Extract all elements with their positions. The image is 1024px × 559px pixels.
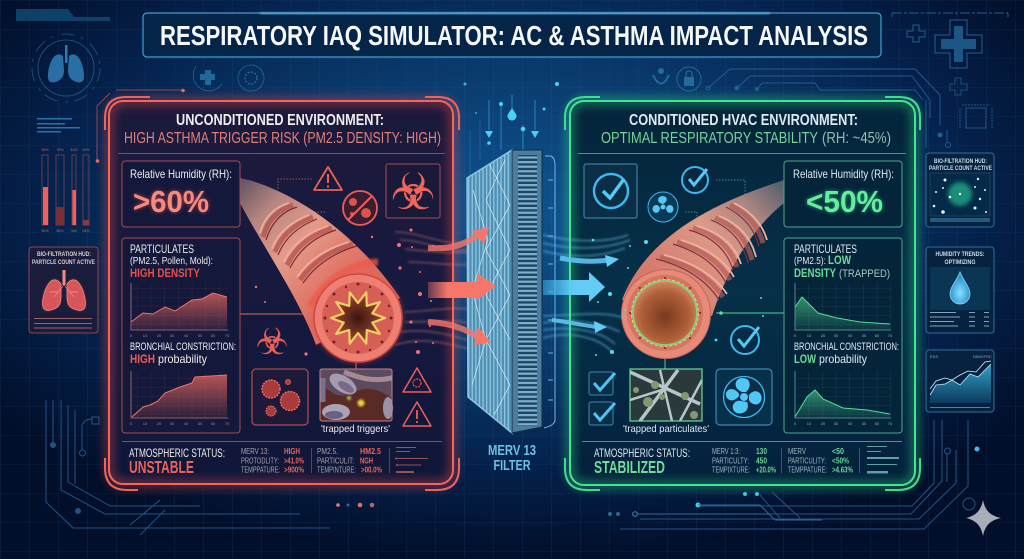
box: particulates and constriction xyxy=(784,238,902,433)
chart: particulate density: 0 xyxy=(794,333,797,338)
mini gauges: red xyxy=(395,447,428,473)
title: RESPIRATORY IAQ SIMULATOR: AC & ASTHMA IMPACT ANALYSIS xyxy=(160,20,868,51)
chart: particulate density: 40 xyxy=(848,333,853,338)
icon: lock dial xyxy=(677,67,701,91)
chart: particulate density: 70 xyxy=(225,333,230,338)
bar chart: left side gauges: 8.20 xyxy=(71,148,77,152)
heading: left HUD xyxy=(32,252,95,266)
readout table: red: PM2.5. xyxy=(317,447,338,456)
header accent: top left bar xyxy=(16,9,110,21)
heading xyxy=(124,112,441,147)
readout table: green: MERV xyxy=(788,447,807,456)
chart: constriction probability: 10 xyxy=(807,421,812,426)
icon: warning triangle lower xyxy=(403,402,431,426)
icon: lung scanner xyxy=(32,34,100,102)
readout table: red: PROTODLITY: xyxy=(241,456,279,466)
icon: check circle lower xyxy=(731,326,759,354)
chart: particulate density: 40 xyxy=(184,333,189,338)
panel: trend chart right: DINXITRC xyxy=(973,354,992,359)
MERV 13 filter xyxy=(467,150,555,433)
label: MERV 13 filter xyxy=(488,443,536,474)
heading: left HUD: PARTICLE COUNT ACTIVE xyxy=(32,260,95,266)
readout table: red xyxy=(241,447,390,474)
airflow arrows: red xyxy=(428,227,496,345)
chart: particulate density: 60 xyxy=(211,333,216,338)
text: particulates: HIGH DENSITY xyxy=(130,268,200,280)
readout table: green: >4.63% xyxy=(832,466,853,474)
chart: constriction probability: 30 xyxy=(170,421,175,426)
icon: warning triangle biohazard xyxy=(403,368,431,392)
chart: constriction probability: 0 xyxy=(130,421,133,426)
circuit traces: right side top xyxy=(926,100,950,148)
heading: OPTIMAL RESPIRATORY STABILITY xyxy=(601,130,818,147)
panel: humidity trends xyxy=(926,247,994,333)
chart: particulate density: 30 xyxy=(834,333,839,338)
bar chart: left side gauges: 50% xyxy=(41,229,49,233)
icon: fan circle xyxy=(648,192,678,222)
text lines: left decorative xyxy=(37,118,80,132)
heading: (RH: ~45%) xyxy=(822,130,891,147)
icon: biohazard box: ☣ xyxy=(391,163,435,221)
title banner xyxy=(143,12,881,57)
icon: fan box xyxy=(716,369,772,425)
chart: constriction probability: 20 xyxy=(157,421,162,426)
readout table: green: TEMPPATURE: xyxy=(788,466,827,474)
text: bronchial constriction xyxy=(794,341,899,366)
text: bronchial constriction: probability xyxy=(158,352,207,366)
airway opening xyxy=(312,272,404,364)
icons: upper right medical crosses xyxy=(892,13,1008,95)
right side decorative chip xyxy=(960,105,992,128)
readout table: green: +20.0% xyxy=(756,466,776,474)
bar chart: left side gauges: 54% xyxy=(41,148,49,152)
box: particulates and constriction xyxy=(122,238,240,433)
center data lines xyxy=(470,95,535,175)
chart: particulate density: 20 xyxy=(821,333,826,338)
panel: unconditioned environment xyxy=(105,97,459,490)
corner brackets xyxy=(565,97,920,490)
icon: warning triangle xyxy=(314,167,342,190)
icon: medical cross dial xyxy=(193,66,222,91)
box: relative humidity: <50% xyxy=(806,184,883,219)
readout table: red: MERV 13: xyxy=(241,447,269,456)
readout table: red: >00.0% xyxy=(361,466,382,474)
bar chart: left side gauges: 50% xyxy=(56,229,64,233)
readout table: green: 450 xyxy=(756,456,767,466)
box: relative humidity xyxy=(122,161,240,227)
icon: check box large xyxy=(584,164,637,218)
icons: small check boxes xyxy=(589,372,615,425)
bar chart: left side gauges xyxy=(41,148,90,233)
status dots: left xyxy=(336,503,374,507)
airway connectors xyxy=(278,179,325,225)
box: relative humidity xyxy=(784,161,902,227)
status: stabilized: STABILIZED xyxy=(594,457,665,477)
circuit: left dot connector xyxy=(96,89,185,163)
circuit traces: lower left xyxy=(46,400,330,535)
readout table: red: PARTICULIT: xyxy=(317,456,354,466)
heading: humidity trends xyxy=(936,251,984,266)
particles: cyan xyxy=(592,239,764,356)
chart: constriction probability: 30 xyxy=(834,421,839,426)
air flow streaks: cyan xyxy=(543,235,630,352)
glowing node: lower right xyxy=(974,446,980,452)
chart: constriction probability: 40 xyxy=(184,421,189,426)
text: particulates xyxy=(130,244,213,280)
panel: bio-filtration HUD right xyxy=(926,153,994,227)
filter slatted side xyxy=(512,150,542,433)
heading: right HUD xyxy=(929,159,992,172)
heading xyxy=(601,112,891,147)
airway opening xyxy=(622,270,710,358)
text: particulates: (TRAPPED) xyxy=(839,268,890,280)
readout table: red: TEMPPATURE: xyxy=(241,466,280,474)
chart: constriction probability: 40 xyxy=(848,421,853,426)
heading: right HUD: PARTICLE COUNT ACTIVE xyxy=(929,166,992,172)
box: relative humidity: <50% xyxy=(806,184,883,219)
chart: particulate density: 20 xyxy=(157,333,162,338)
heading: HIGH ASTHMA TRIGGER RISK (PM2.5 DENSITY: HIGH) xyxy=(124,130,441,147)
heading: right HUD: BIO-FILTRATION HUD: xyxy=(934,159,987,165)
chart: constriction probability: 60 xyxy=(211,421,216,426)
panel: conditioned HVAC environment xyxy=(565,97,920,490)
connectors xyxy=(685,180,745,226)
bar chart: left side gauges: 54% xyxy=(82,148,90,152)
status: unstable: ATMOSPHERIC STATUS: xyxy=(129,446,225,460)
status dots: right xyxy=(608,492,822,520)
text: bronchial constriction: probability xyxy=(819,352,867,366)
heading: UNCONDITIONED ENVIRONMENT: xyxy=(176,112,384,129)
chart: particulate density: 0 xyxy=(130,333,133,338)
air flow streaks: red xyxy=(395,232,490,350)
bar chart: left side gauges: 5x5 xyxy=(71,229,77,233)
text: bronchial constriction xyxy=(130,341,236,366)
icon: gear dial xyxy=(238,65,264,91)
status: unstable xyxy=(129,446,225,477)
mini gauges: green xyxy=(867,446,899,474)
text: particulates: (PM2.5): xyxy=(794,255,826,267)
box: relative humidity: Relative Humidity (RH): xyxy=(130,167,232,181)
area chart xyxy=(930,364,991,403)
caption: trapped particulates: 'trapped particulates' xyxy=(623,423,709,435)
chart: particulate density: 10 xyxy=(807,333,812,338)
text: particulates xyxy=(794,244,890,280)
readout table: red: >41.0% xyxy=(284,456,304,466)
readout table: red: HM2.5 xyxy=(360,447,381,456)
airflow arrows: blue xyxy=(543,255,619,333)
icon: virus box xyxy=(252,369,308,425)
status: stabilized: ATMOSPHERIC STATUS: xyxy=(594,446,690,460)
readout table: red: >900% xyxy=(284,466,304,474)
bar chart: left side gauges: 04% xyxy=(82,229,90,233)
readout table: green: <50% xyxy=(832,456,849,466)
text: bronchial constriction: BRONCHIAL CONSTRICTION: xyxy=(794,341,899,353)
readout table: green: PARTICULTY: xyxy=(712,456,749,466)
filter bracket xyxy=(544,156,555,428)
bronchial tube: constricted xyxy=(240,178,404,364)
text: bronchial constriction: HIGH xyxy=(130,352,155,366)
icon: no-virus sign xyxy=(343,191,377,225)
text: bronchial constriction: BRONCHIAL CONSTRICTION: xyxy=(130,341,236,353)
readout table: red: HIGH xyxy=(284,447,300,456)
chart: particulate density: 70 xyxy=(888,333,893,338)
filter pleated face xyxy=(467,150,512,433)
chart: constriction probability: 70 xyxy=(888,421,893,426)
chart: constriction probability: 0 xyxy=(794,421,797,426)
bar chart: left side gauges: 75% xyxy=(56,148,64,152)
chart: particulate density xyxy=(130,283,230,338)
readout table: green: MERV 1:3: xyxy=(712,447,740,456)
circuit traces: lower right xyxy=(620,420,975,529)
panel: trend chart right xyxy=(926,350,994,412)
center data nodes xyxy=(464,82,559,145)
chart: particulate density: 50 xyxy=(862,333,867,338)
text: particulates: PARTICULATES xyxy=(130,244,194,256)
text: particulates: DENSITY xyxy=(794,268,836,280)
heading: left HUD: BIO-FILTRATION HUD: xyxy=(37,252,91,258)
icon: person shield xyxy=(653,68,669,84)
status: unstable: UNSTABLE xyxy=(129,457,194,477)
status: stabilized xyxy=(594,446,690,477)
readout table: green xyxy=(712,447,860,474)
text: particulates: PARTICULATES xyxy=(794,244,857,256)
chart: constriction probability xyxy=(130,371,230,426)
icon: biohazard small: ☣ xyxy=(256,322,288,363)
text: particulates: LOW xyxy=(828,255,851,267)
readout table: green: TEMPIXTURE: xyxy=(712,466,750,474)
readout table: green: PARTICULITY: xyxy=(788,456,826,466)
readout table: green: <50 xyxy=(832,447,844,456)
heading: humidity trends: HUMIDITY TRENDS: xyxy=(936,251,984,258)
chart: constriction probability xyxy=(794,371,893,426)
bronchial tube: clear xyxy=(622,180,784,358)
chart: particulate density xyxy=(794,283,893,338)
particle map xyxy=(930,173,990,216)
photo: trapped triggers xyxy=(320,369,393,421)
icon: check circle xyxy=(682,167,708,193)
chart: particulate density: 60 xyxy=(875,333,880,338)
chart: constriction probability: 50 xyxy=(198,421,203,426)
panel: trend chart right: EXS xyxy=(930,354,938,359)
chart: constriction probability: 20 xyxy=(821,421,826,426)
readout table: red: TEMPINTURE: xyxy=(317,466,356,474)
label: MERV 13 filter: FILTER xyxy=(494,458,531,474)
chart: particulate density: 10 xyxy=(143,333,148,338)
icon: sparkle watermark xyxy=(966,500,1001,536)
box: relative humidity: >60% xyxy=(133,184,209,219)
chart: constriction probability: 10 xyxy=(143,421,148,426)
label: MERV 13 filter: MERV 13 xyxy=(488,443,536,459)
chart: constriction probability: 60 xyxy=(875,421,880,426)
chart: constriction probability: 50 xyxy=(862,421,867,426)
photo: trapped particulates xyxy=(630,369,702,421)
heading: CONDITIONED HVAC ENVIRONMENT: xyxy=(629,112,858,129)
icon: water drop xyxy=(950,272,970,304)
particles: red xyxy=(255,228,434,356)
caption: trapped triggers: 'trapped triggers' xyxy=(321,423,390,435)
chart: particulate density: 30 xyxy=(170,333,175,338)
chart: particulate density: 50 xyxy=(198,333,203,338)
text: bronchial constriction: LOW xyxy=(794,352,817,366)
icon: red lungs xyxy=(42,270,86,311)
readout table: green: 130 xyxy=(756,447,767,456)
box: relative humidity: Relative Humidity (RH): xyxy=(793,167,894,181)
text: particulates: (PM2.5, Pollen, Mold): xyxy=(130,255,213,267)
box: relative humidity: >60% xyxy=(133,184,209,219)
panel: left bio-filtration HUD xyxy=(29,247,98,333)
readout table: red: NGH xyxy=(360,456,373,466)
corner brackets xyxy=(105,97,459,490)
chart: constriction probability: 70 xyxy=(225,421,230,426)
heading: humidity trends: OPTIMIZING xyxy=(944,259,976,266)
circuit traces: upper right xyxy=(706,69,940,125)
